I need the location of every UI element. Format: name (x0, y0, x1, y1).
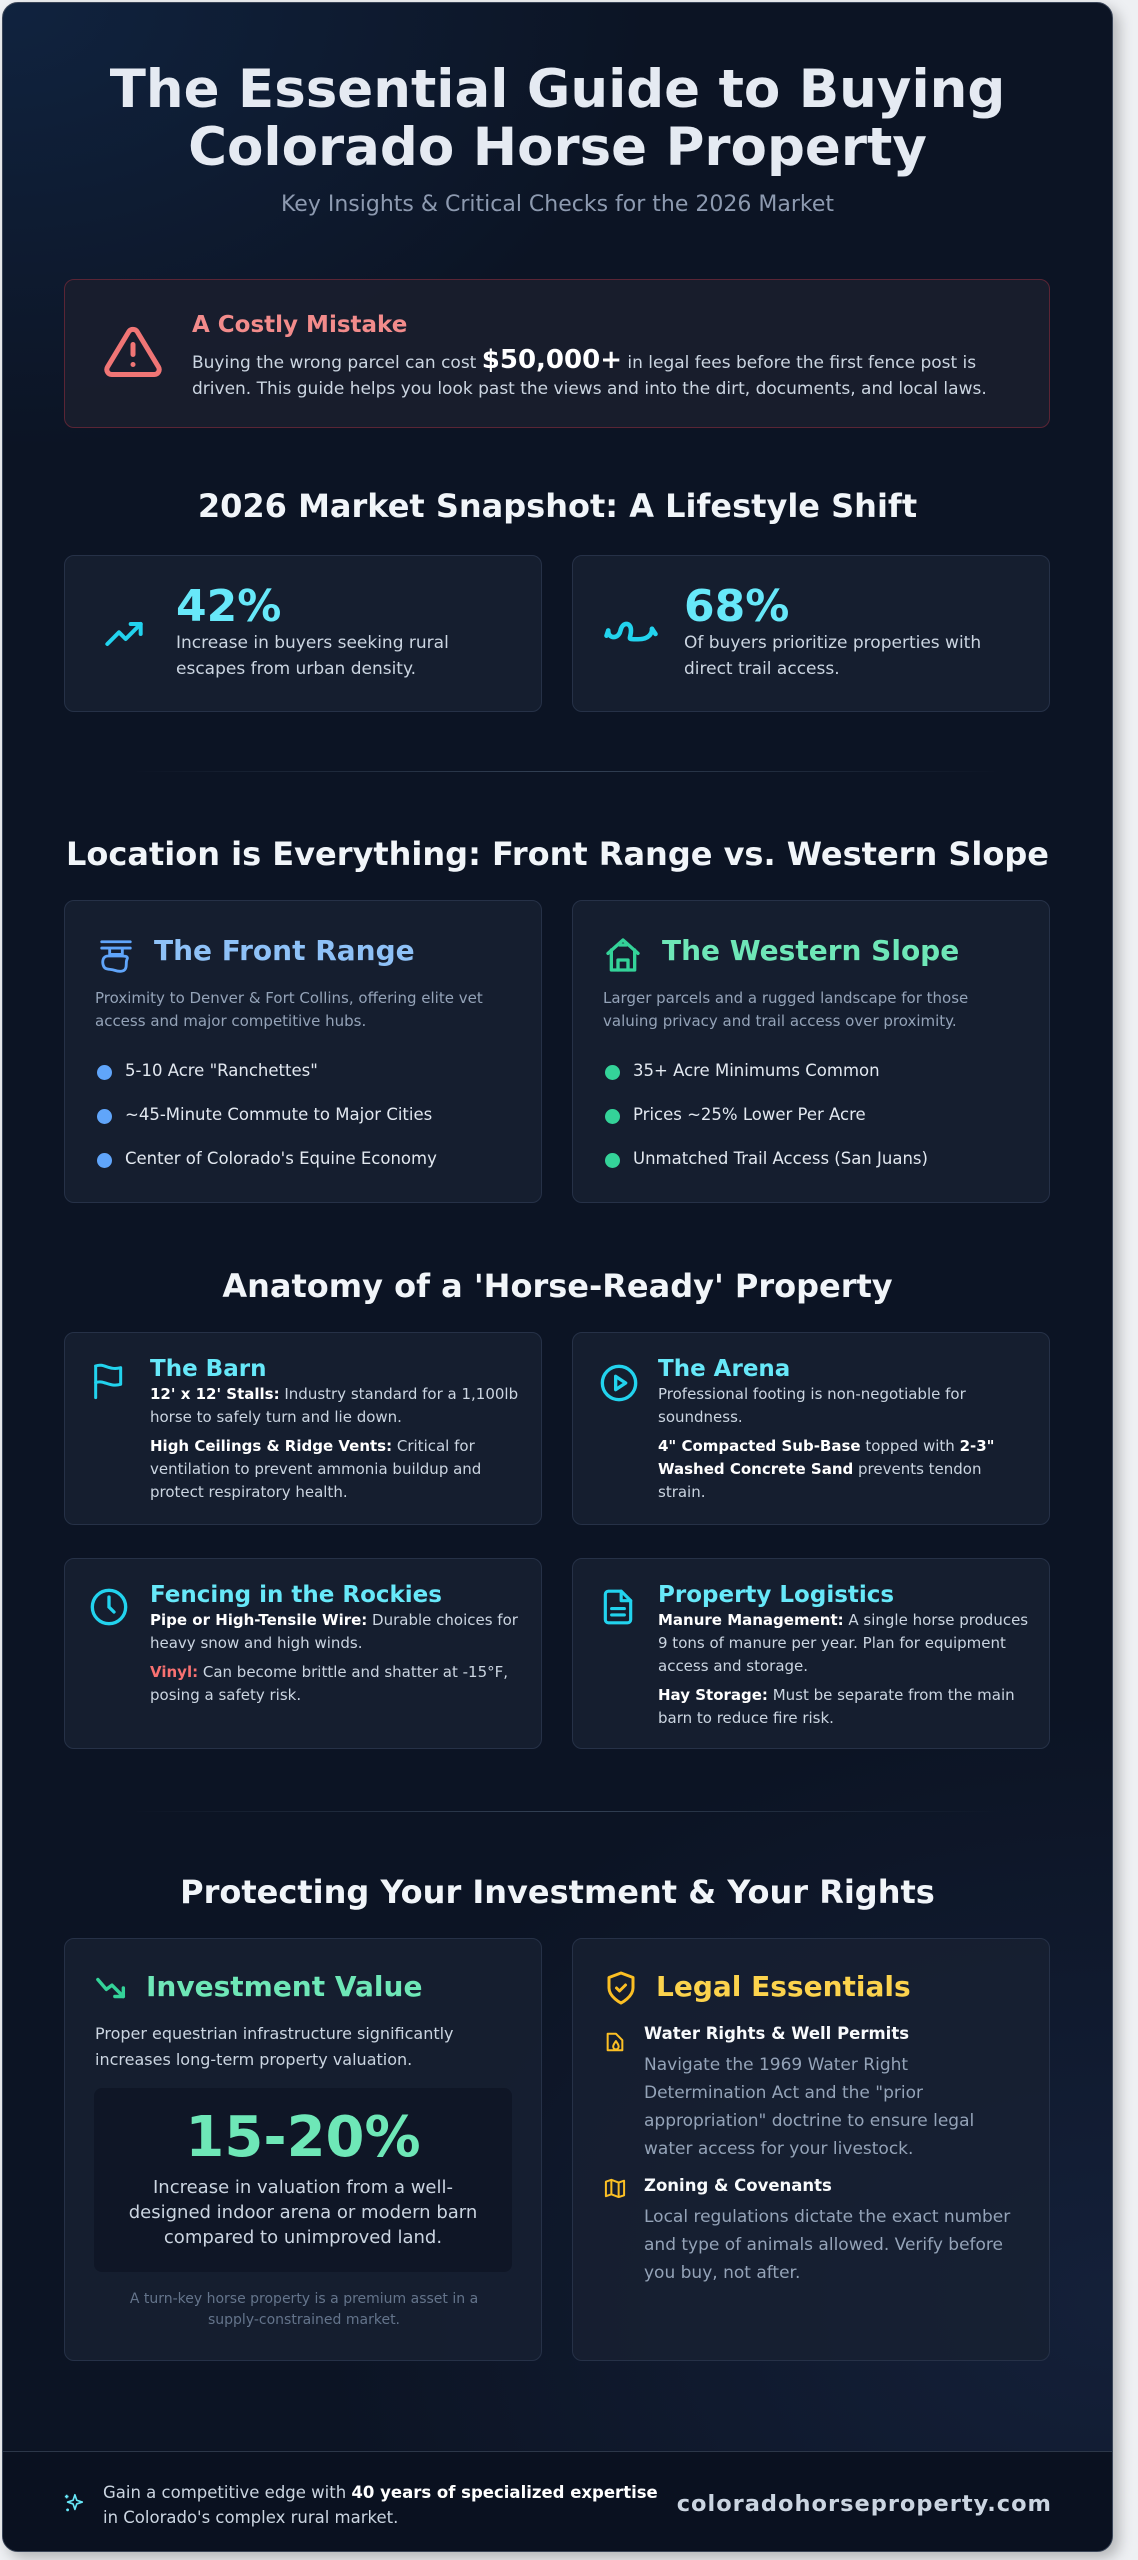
item: zoning (604, 2176, 1010, 2283)
item: water rights: Water Rights & Well Permits (644, 2024, 909, 2043)
bullet list: Unmatched Trail Access (San Juans) (633, 1149, 928, 1168)
heading: location: Location is Everything: Front Range vs. Western Slope (66, 835, 1049, 873)
callout heading: A Costly Mistake (192, 312, 407, 338)
title: Colorado Horse Property (188, 117, 927, 178)
heading: Property Logistics (658, 1582, 894, 1608)
text: 12' x 12' Stalls: Industry standard for a 1,100lb horse to safely turn and lie down. (150, 1385, 518, 1426)
icon: warning triangle (104, 326, 162, 377)
footer (3, 2451, 1114, 2553)
bullet list (605, 1061, 928, 1168)
note: A turn-key horse property is a premium asset in a supply-constrained market. (130, 2291, 478, 2328)
footer text (103, 2483, 658, 2527)
panel: investment value (64, 1938, 542, 2361)
item: zoning: Zoning & Covenants (644, 2176, 832, 2195)
text: Pipe or High-Tensile Wire: Durable choices for heavy snow and high winds. (150, 1611, 518, 1652)
heading: Investment Value (146, 1970, 422, 2003)
callout text: Buying the wrong parcel can cost $50,000+ in legal fees before the first fence post is driven. This guide helps you look past the views and into the dirt, documents, and local laws. (192, 345, 987, 399)
icon: shield (608, 1972, 634, 2004)
title (110, 59, 1005, 178)
description: Larger parcels and a rugged landscape for those valuing privacy and trail access over proximity. (603, 989, 968, 1030)
icon: trending up (105, 622, 143, 646)
stat box: Increase in valuation from a well-designed indoor arena or modern barn compared to unimproved land. (129, 2177, 477, 2248)
footer text: in Colorado's complex rural market. (103, 2508, 398, 2527)
heading: protecting: Protecting Your Investment & Your Rights (180, 1873, 935, 1911)
text: Professional footing is non-negotiable for soundness. (658, 1385, 966, 1426)
heading: The Western Slope (662, 934, 959, 967)
footer url: coloradohorseproperty.com (677, 2491, 1052, 2517)
icon: sparkle (64, 2494, 83, 2512)
icon: trending (96, 1978, 126, 1998)
stat description: Increase in buyers seeking rural escapes from urban density. (176, 633, 449, 679)
heading: The Front Range (154, 934, 415, 967)
bullet list: Center of Colorado's Equine Economy (125, 1149, 437, 1168)
callout: costly mistake (64, 279, 1050, 428)
subtitle: Key Insights & Critical Checks for the 2026 Market (281, 192, 834, 217)
description: Proximity to Denver & Fort Collins, offering elite vet access and major competitive hubs. (95, 989, 483, 1030)
title: The Essential Guide to Buying (110, 59, 1005, 120)
stat description: Of buyers prioritize properties with direct trail access. (684, 633, 981, 679)
icon: clock (90, 1588, 128, 1626)
stat number: 68% (684, 581, 789, 632)
text: 4" Compacted Sub-Base topped with 2-3" Washed Concrete Sand prevents tendon strain. (658, 1437, 994, 1501)
intro text: Proper equestrian infrastructure significantly increases long-term property valuation. (95, 2024, 454, 2069)
icon: flag (94, 1364, 122, 1400)
panel: legal essentials (572, 1938, 1050, 2361)
heading: Legal Essentials (656, 1970, 911, 2003)
bullet list: 35+ Acre Minimums Common (633, 1061, 880, 1080)
panel: front range (64, 900, 542, 1203)
heading: Fencing in the Rockies (150, 1582, 442, 1608)
text (150, 1611, 518, 1704)
icon: trail (604, 622, 658, 642)
stat number: 42% (176, 581, 281, 632)
panel: stat 42% (64, 555, 542, 712)
stat box: 15-20% (185, 2105, 421, 2170)
panel: the barn (64, 1332, 542, 1525)
text: Manure Management: A single horse produces 9 tons of manure per year. Plan for equipment access and storage. (658, 1611, 1028, 1675)
item: water rights: Navigate the 1969 Water Right Determination Act and the "prior appropriation" doctrine to ensure legal water access for your livestock. (644, 2055, 974, 2159)
text: Vinyl: Can become brittle and shatter at -15°F, posing a safety risk. (150, 1663, 508, 1704)
text (150, 1385, 518, 1501)
item: water rights (606, 2024, 974, 2159)
bullet list: 5-10 Acre "Ranchettes" (125, 1061, 318, 1080)
stat box (94, 2088, 512, 2272)
icon: document (604, 1590, 632, 1624)
icon: barn (606, 938, 640, 972)
bullet list: Prices ~25% Lower Per Acre (633, 1105, 866, 1124)
text: Hay Storage: Must be separate from the main barn to reduce fire risk. (658, 1686, 1015, 1727)
text (658, 1385, 994, 1501)
icon: front range (100, 940, 132, 973)
icon: play circle (600, 1364, 638, 1402)
heading: The Arena (658, 1356, 790, 1382)
text (658, 1611, 1028, 1727)
panel: the arena (572, 1332, 1050, 1525)
heading: market snapshot: 2026 Market Snapshot: A Lifestyle Shift (198, 487, 917, 525)
panel: logistics (572, 1558, 1050, 1749)
heading: The Barn (150, 1356, 266, 1382)
heading: anatomy: Anatomy of a 'Horse-Ready' Property (222, 1267, 893, 1305)
item: zoning: Local regulations dictate the exact number and type of animals allowed. Verify before you buy, not after. (644, 2207, 1010, 2283)
panel: western slope (572, 900, 1050, 1203)
panel: stat 68% (572, 555, 1050, 712)
bullet list (97, 1061, 437, 1168)
bullet list: ~45-Minute Commute to Major Cities (125, 1105, 432, 1124)
panel: fencing (64, 1558, 542, 1749)
text: High Ceilings & Ridge Vents: Critical for ventilation to prevent ammonia buildup and protect respiratory health. (150, 1437, 481, 1501)
footer text: Gain a competitive edge with 40 years of specialized expertise (103, 2483, 658, 2502)
